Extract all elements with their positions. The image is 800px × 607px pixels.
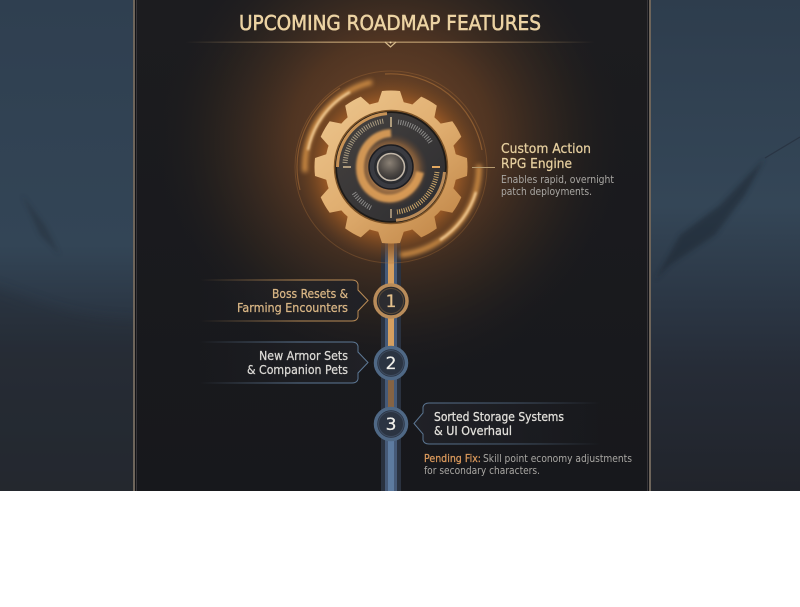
callout heading: Custom Action <box>501 142 591 157</box>
gear body <box>314 90 468 244</box>
card 2: new armor sets <box>200 342 368 383</box>
pending fix note: Skill point economy adjustments <box>483 453 632 465</box>
card 1: boss resets: Farming Encounters <box>237 301 348 315</box>
title: UPCOMING ROADMAP FEATURES <box>239 11 541 35</box>
card 3: sorted storage: & UI Overhaul <box>434 424 512 438</box>
card 1: boss resets <box>200 280 368 321</box>
callout: custom action RPG engine <box>472 142 614 198</box>
card 3: sorted storage <box>414 403 600 444</box>
card 3: sorted storage: Sorted Storage Systems <box>434 410 564 424</box>
dial markers <box>343 117 440 218</box>
right textured side panel <box>651 0 800 491</box>
central swirl <box>354 133 428 207</box>
step 2 badge: 2 <box>386 354 396 374</box>
dial disc <box>334 110 448 224</box>
step 1 badge: 1 <box>386 292 396 312</box>
callout: custom action RPG engine: RPG Engine <box>501 157 572 172</box>
orange energy rings <box>295 71 487 263</box>
card 2: new armor sets: & Companion Pets <box>247 363 348 377</box>
connector line <box>472 166 495 168</box>
main dark panel <box>133 0 651 491</box>
card 2: new armor sets: New Armor Sets <box>259 349 348 363</box>
card 1: boss resets: Boss Resets & <box>272 287 348 301</box>
pending fix note: Pending Fix: <box>424 453 481 465</box>
icon: glowing gear <box>293 69 489 265</box>
dial tick arcs <box>345 121 437 212</box>
pending fix note <box>424 453 632 477</box>
left textured side panel <box>0 0 133 491</box>
callout: custom action RPG engine: patch deployments. <box>501 186 592 198</box>
pending fix note: for secondary characters. <box>424 465 540 477</box>
callout description: Enables rapid, overnight <box>501 174 614 186</box>
timeline rail <box>381 232 401 491</box>
halo glow <box>293 69 489 265</box>
hub <box>369 145 413 189</box>
step 3 badge <box>376 408 406 440</box>
step 2 badge <box>376 348 406 378</box>
step 1 badge <box>375 285 407 317</box>
title divider with chevron <box>185 42 595 47</box>
step 3 badge: 3 <box>386 415 396 435</box>
